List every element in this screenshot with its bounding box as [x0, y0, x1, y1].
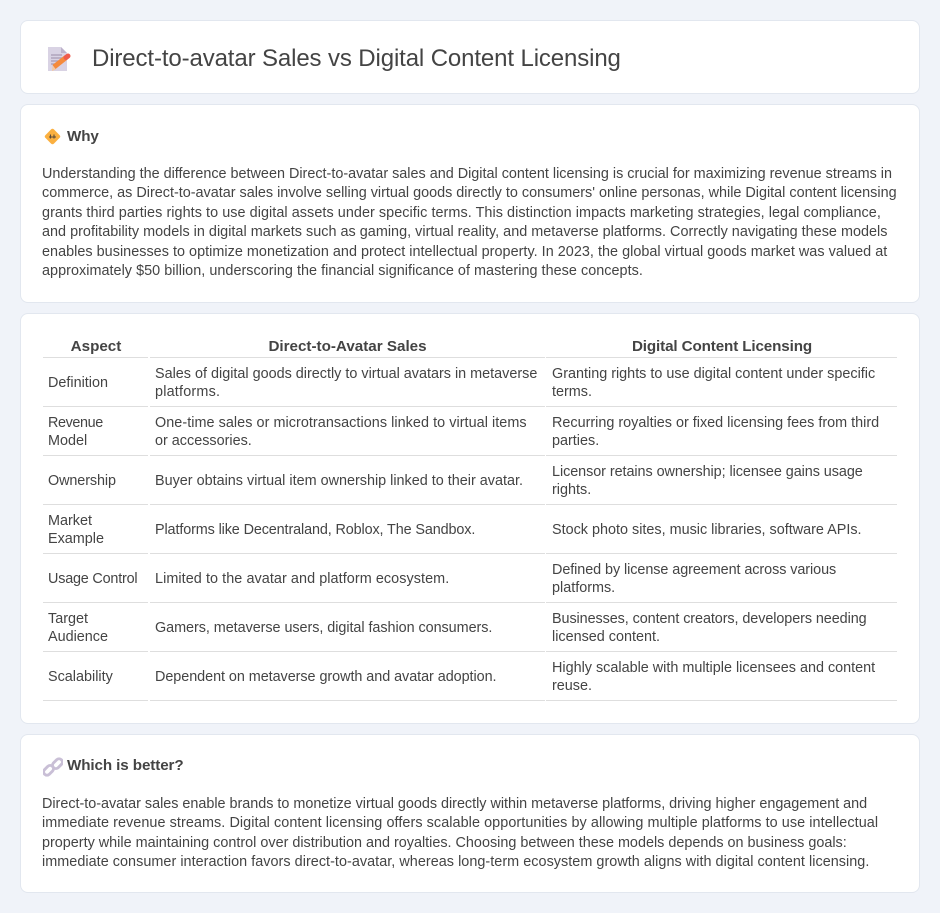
text: why paragraph: grants third parties rights to use digital assets under specific terms. This distinction impacts marketing strategies, legal compliance,: [42, 205, 881, 221]
table header: Direct-to-Avatar Sales: [268, 338, 427, 355]
text: why paragraph: enables businesses to optimize monetization and protect intellectual property. In 2023, the global virtual goods market was valued at: [42, 244, 887, 260]
row: scalability: Dependent on metaverse growth and avatar adoption.: [155, 669, 497, 685]
text: why paragraph: Understanding the difference between Direct-to-avatar sales and Digital content licensing is crucial for maximizing revenue streams in: [42, 166, 892, 182]
text: why paragraph: and profitability models in digital markets such as gaming, virtual reality, and metaverse platforms. Correctly navigating these models: [42, 224, 887, 240]
title: Direct-to-avatar Sales vs Digital Content Licensing: [92, 45, 621, 72]
row: definition: Granting rights to use digital content under specific: [552, 366, 875, 382]
row: revenue model: One-time sales or microtransactions linked to virtual items: [155, 415, 527, 431]
panel: why: [20, 104, 920, 303]
row: revenue model: or accessories.: [155, 433, 252, 449]
panel: which is better: [20, 734, 920, 893]
row: target audience: [48, 611, 867, 645]
row: market example: Market: [48, 513, 92, 529]
row: ownership: [48, 464, 863, 498]
row: usage control: Limited to the avatar and platform ecosystem.: [155, 571, 449, 587]
row: usage control: [48, 562, 836, 596]
row: scalability: [48, 660, 876, 694]
text: why paragraph: commerce, as Direct-to-avatar sales involve selling virtual goods directly to consumers' online personas, while Digital content licensing: [42, 185, 897, 201]
table header: Aspect: [71, 338, 121, 355]
text: which is better paragraph: Direct-to-avatar sales enable brands to monetize virtual goods directly within metaverse platforms, driving higher engagement and: [42, 796, 867, 812]
row: market example: [48, 513, 862, 547]
text: which is better paragraph: property while maintaining control over distribution and royalties. Choosing between these models depends on business goals:: [42, 835, 847, 851]
row: definition: Definition: [48, 375, 108, 391]
icon: document with pencil: [48, 47, 70, 71]
row: usage control: Defined by license agreement across various: [552, 562, 836, 578]
panel: comparison table: [20, 313, 920, 724]
row: definition: Sales of digital goods directly to virtual avatars in metaverse: [155, 366, 537, 382]
row: target audience: Audience: [48, 629, 108, 645]
text: which is better paragraph: immediate revenue streams. Digital content licensing offers scalable opportunities by allowing multiple platforms to use intellectual: [42, 815, 878, 831]
row: ownership: Buyer obtains virtual item ownership linked to their avatar.: [155, 473, 523, 489]
panel: title header: [20, 20, 920, 94]
row: market example: Platforms like Decentraland, Roblox, The Sandbox.: [155, 522, 475, 538]
icon: warning diamond: [44, 128, 60, 144]
table header: [71, 338, 812, 355]
row: usage control: Usage Control: [48, 571, 137, 587]
row: target audience: Target: [48, 611, 88, 627]
row: scalability: reuse.: [552, 678, 592, 694]
row: scalability: Scalability: [48, 669, 113, 685]
text: which is better paragraph: immediate consumer interaction favors direct-to-avatar, whereas long-term ecosystem growth aligns with digital content licensing.: [42, 854, 869, 870]
text: why paragraph: approximately $50 billion, underscoring the financial significance of mastering these concepts.: [42, 263, 643, 279]
row: target audience: licensed content.: [552, 629, 660, 645]
row: target audience: Businesses, content creators, developers needing: [552, 611, 867, 627]
row: revenue model: [48, 415, 879, 449]
row: definition: [48, 366, 875, 400]
row: revenue model: Revenue: [48, 415, 103, 431]
row: revenue model: parties.: [552, 433, 599, 449]
row: revenue model: Model: [48, 433, 87, 449]
row: definition: platforms.: [155, 384, 220, 400]
row: target audience: Gamers, metaverse users, digital fashion consumers.: [155, 620, 492, 636]
heading: why: Why: [67, 128, 99, 145]
row: market example: Stock photo sites, music libraries, software APIs.: [552, 522, 862, 538]
icon: chain link: [43, 757, 63, 777]
heading: which is better: Which is better?: [67, 757, 184, 774]
row: ownership: Licensor retains ownership; licensee gains usage: [552, 464, 863, 480]
row: scalability: Highly scalable with multiple licensees and content: [552, 660, 875, 676]
row: revenue model: Recurring royalties or fixed licensing fees from third: [552, 415, 879, 431]
row: market example: Example: [48, 531, 104, 547]
table header: Digital Content Licensing: [632, 338, 812, 355]
row: definition: terms.: [552, 384, 592, 400]
row: ownership: Ownership: [48, 473, 116, 489]
text: which is better paragraph: [42, 796, 878, 870]
row: usage control: platforms.: [552, 580, 615, 596]
text: why paragraph: [42, 166, 897, 279]
row: ownership: rights.: [552, 482, 591, 498]
